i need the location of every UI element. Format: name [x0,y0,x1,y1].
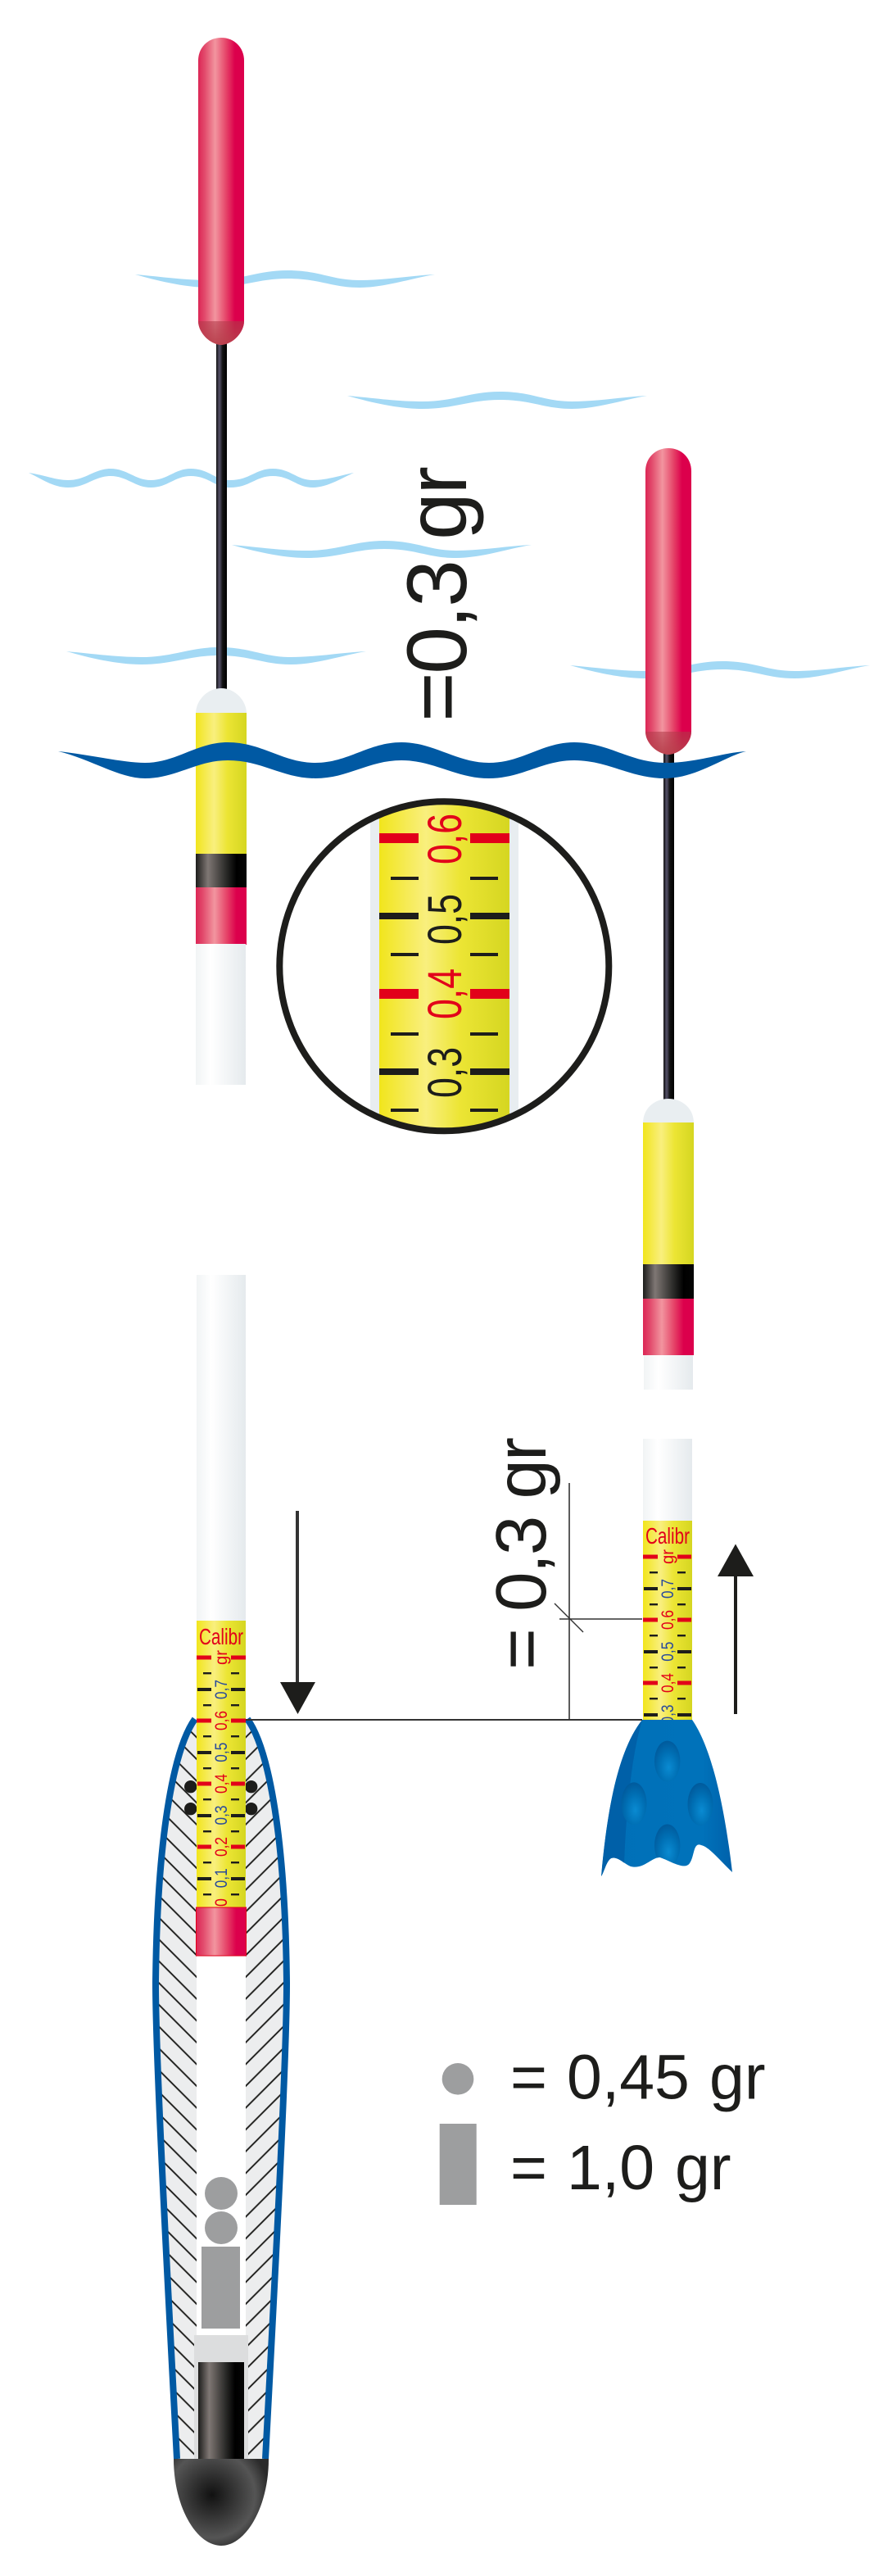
legend: bar weight [440,2124,731,2205]
magnifier circle with scale: 0,6 [419,814,472,864]
label: =0,3 gr: =0,3 gr [390,466,485,722]
dimension lines [246,1483,642,1720]
right float upper part [643,448,694,1390]
weights inside the body [201,2177,240,2329]
legend: bar weight: 1,0 [567,2133,654,2203]
left float upper part [196,38,247,1085]
left lower stem with calibration scale: 0,5 [212,1743,231,1762]
magnifier circle with scale: 0,3 [419,1047,472,1098]
magnifier circle with scale: 0,5 [419,894,472,945]
right lower stem with calibration scale: 0,5 [659,1642,677,1662]
right lower stem with calibration scale: 0,6 [659,1610,677,1630]
left lower stem with calibration scale: 0 [212,1898,231,1907]
right lower stem with calibration scale: 0,7 [659,1579,677,1599]
black lead nose [174,2459,269,2546]
legend: ball weight: gr [709,2043,765,2113]
right lower stem with calibration scale: 0,4 [659,1673,677,1693]
left lower stem with calibration scale: gr [212,1650,231,1665]
left lower stem with calibration scale: 0,3 [212,1806,231,1825]
down arrow [280,1511,315,1714]
right lower stem with calibration scale [643,1439,692,1724]
light water waves [29,270,870,678]
magnifier circle with scale: 0,4 [419,968,472,1019]
legend: ball weight: = [510,2043,547,2113]
left lower stem with calibration scale: 0,7 [212,1680,231,1699]
label: = 0,3 gr: = 0,3 gr [482,1437,561,1670]
right lower stem with calibration scale: Calibr [645,1523,690,1549]
left lower stem with calibration scale [197,1275,246,1956]
middle light wave over label [232,541,532,558]
right lower stem with calibration scale: 0,3 [659,1704,677,1724]
right lower stem with calibration scale: gr [659,1549,677,1564]
left lower stem with calibration scale: 0,1 [212,1868,231,1888]
blue rubber skirt [601,1720,732,1876]
up arrow [718,1544,754,1714]
legend: ball weight: 0,45 [567,2043,690,2113]
left lower stem with calibration scale: 0,4 [212,1774,231,1794]
left float body cross-section with hatching [156,1712,287,2460]
left lower stem with calibration scale: 0,6 [212,1711,231,1730]
legend: bar weight: = [510,2133,547,2203]
dark blue water surface [58,742,746,778]
legend: ball weight [442,2043,765,2113]
legend: bar weight: gr [675,2133,731,2203]
left lower stem with calibration scale: Calibr [199,1624,243,1649]
left lower stem with calibration scale: 0,2 [212,1837,231,1857]
magnifier circle with scale [279,795,609,1139]
